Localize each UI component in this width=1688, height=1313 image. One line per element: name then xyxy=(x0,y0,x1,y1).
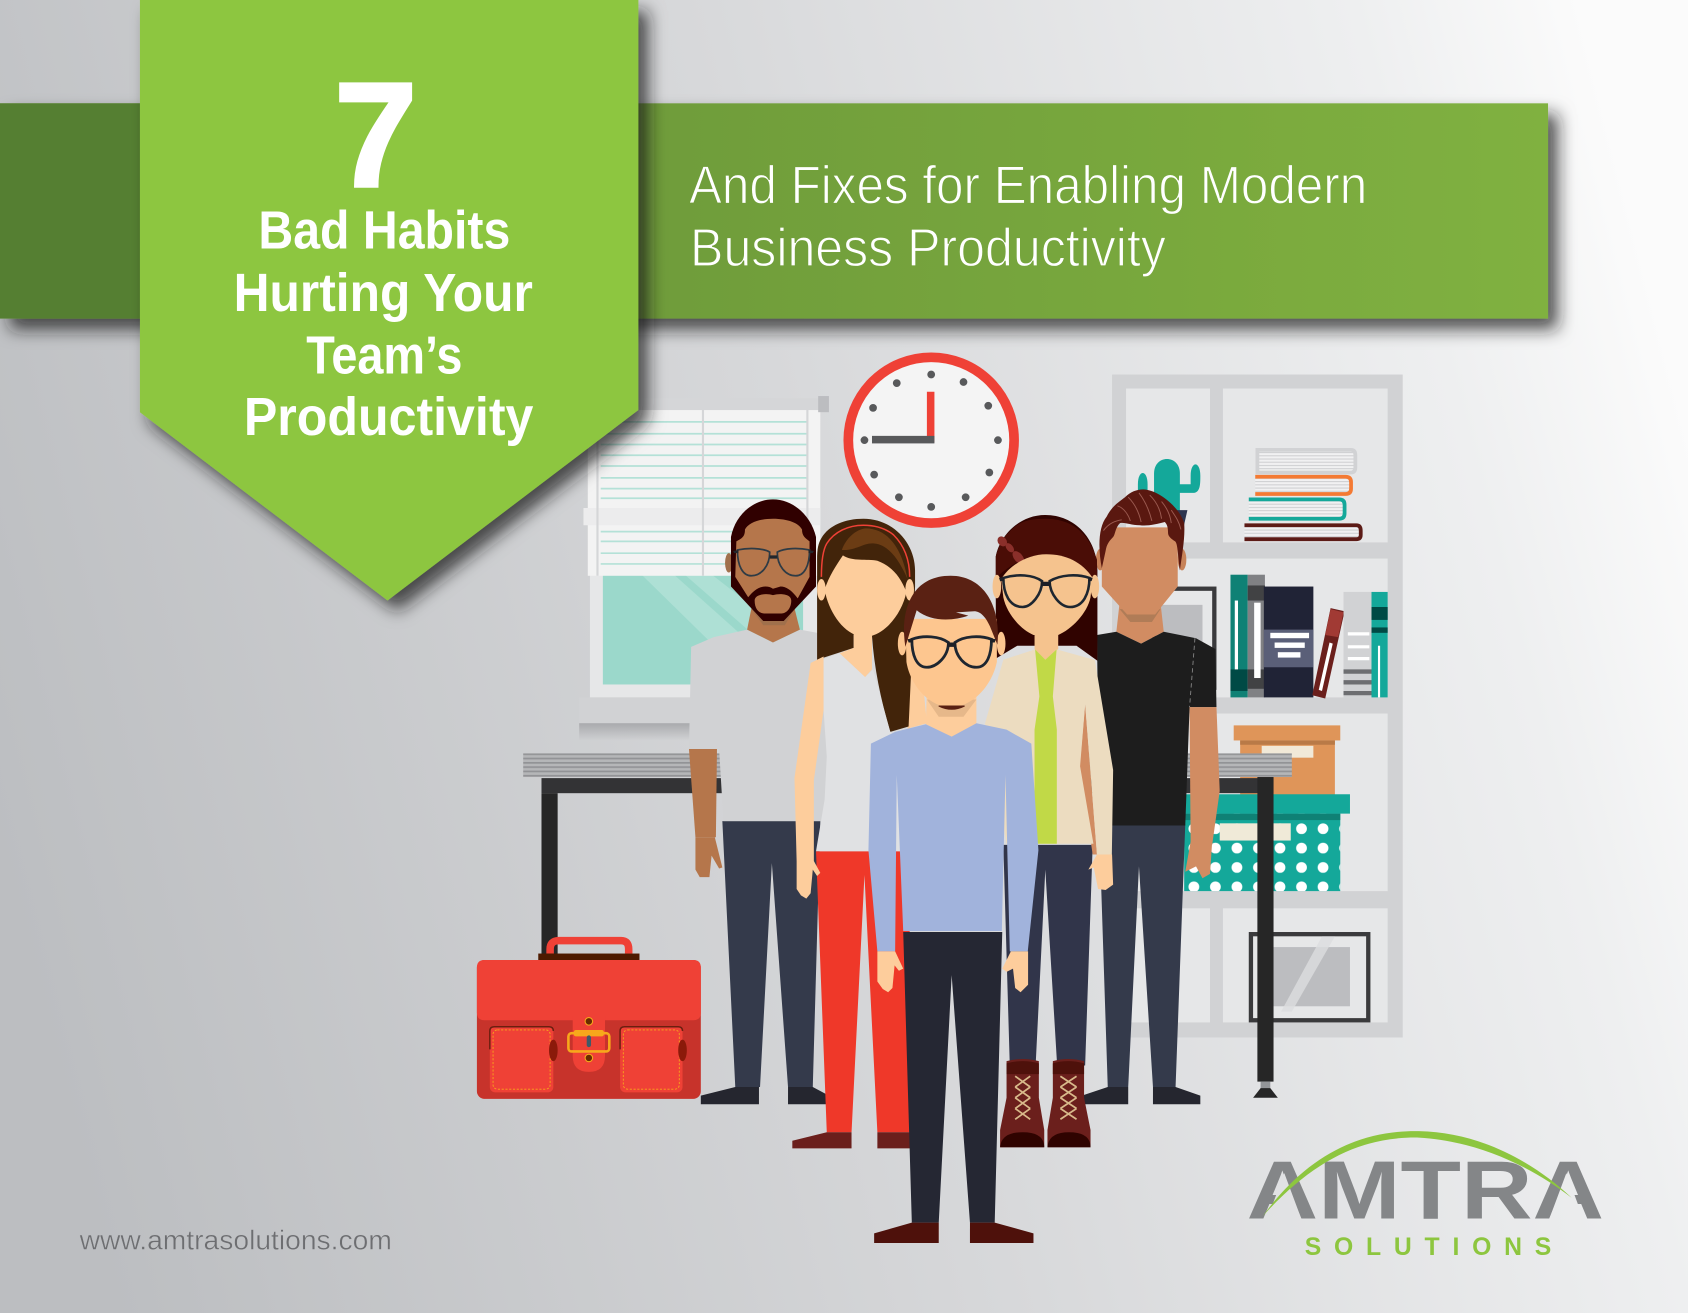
teal polka dot box xyxy=(1184,794,1350,891)
logo: AMTRA xyxy=(1247,1143,1604,1236)
title xyxy=(234,53,533,447)
upright books xyxy=(1230,575,1388,698)
cardboard box xyxy=(1234,725,1340,800)
logo: SOLUTIONS xyxy=(1305,1234,1551,1261)
subtitle xyxy=(689,155,1367,278)
icon: cactus xyxy=(1138,459,1200,543)
person: woman with red trousers xyxy=(792,519,927,1148)
framed picture bottom shelf xyxy=(1251,934,1368,1020)
ribbon band xyxy=(0,103,1548,319)
title: Bad Habits xyxy=(258,201,510,261)
picture frame on shelf xyxy=(1154,589,1214,688)
title: 7 xyxy=(334,53,417,218)
icon: wall clock xyxy=(848,357,1014,523)
website url: www.amtrasolutions.com xyxy=(79,1225,392,1256)
desk xyxy=(523,753,1292,1098)
window with blinds xyxy=(579,396,829,740)
green title banner xyxy=(140,0,638,601)
title: Team’s xyxy=(306,325,462,385)
subtitle: And Fixes for Enabling Modern xyxy=(689,155,1367,215)
person: man in blue sweater xyxy=(868,576,1038,1243)
logo xyxy=(1247,1131,1604,1261)
person: woman in cardigan with boots xyxy=(985,515,1113,1147)
subtitle: Business Productivity xyxy=(690,218,1166,278)
bookshelf xyxy=(1112,375,1403,1037)
title: Hurting Your xyxy=(234,263,533,323)
person: man with beard xyxy=(689,499,829,1104)
title: Productivity xyxy=(244,387,533,447)
stacked books xyxy=(1244,450,1361,539)
person: man in black shirt xyxy=(1082,489,1220,1104)
icon: red briefcase xyxy=(477,941,701,1099)
